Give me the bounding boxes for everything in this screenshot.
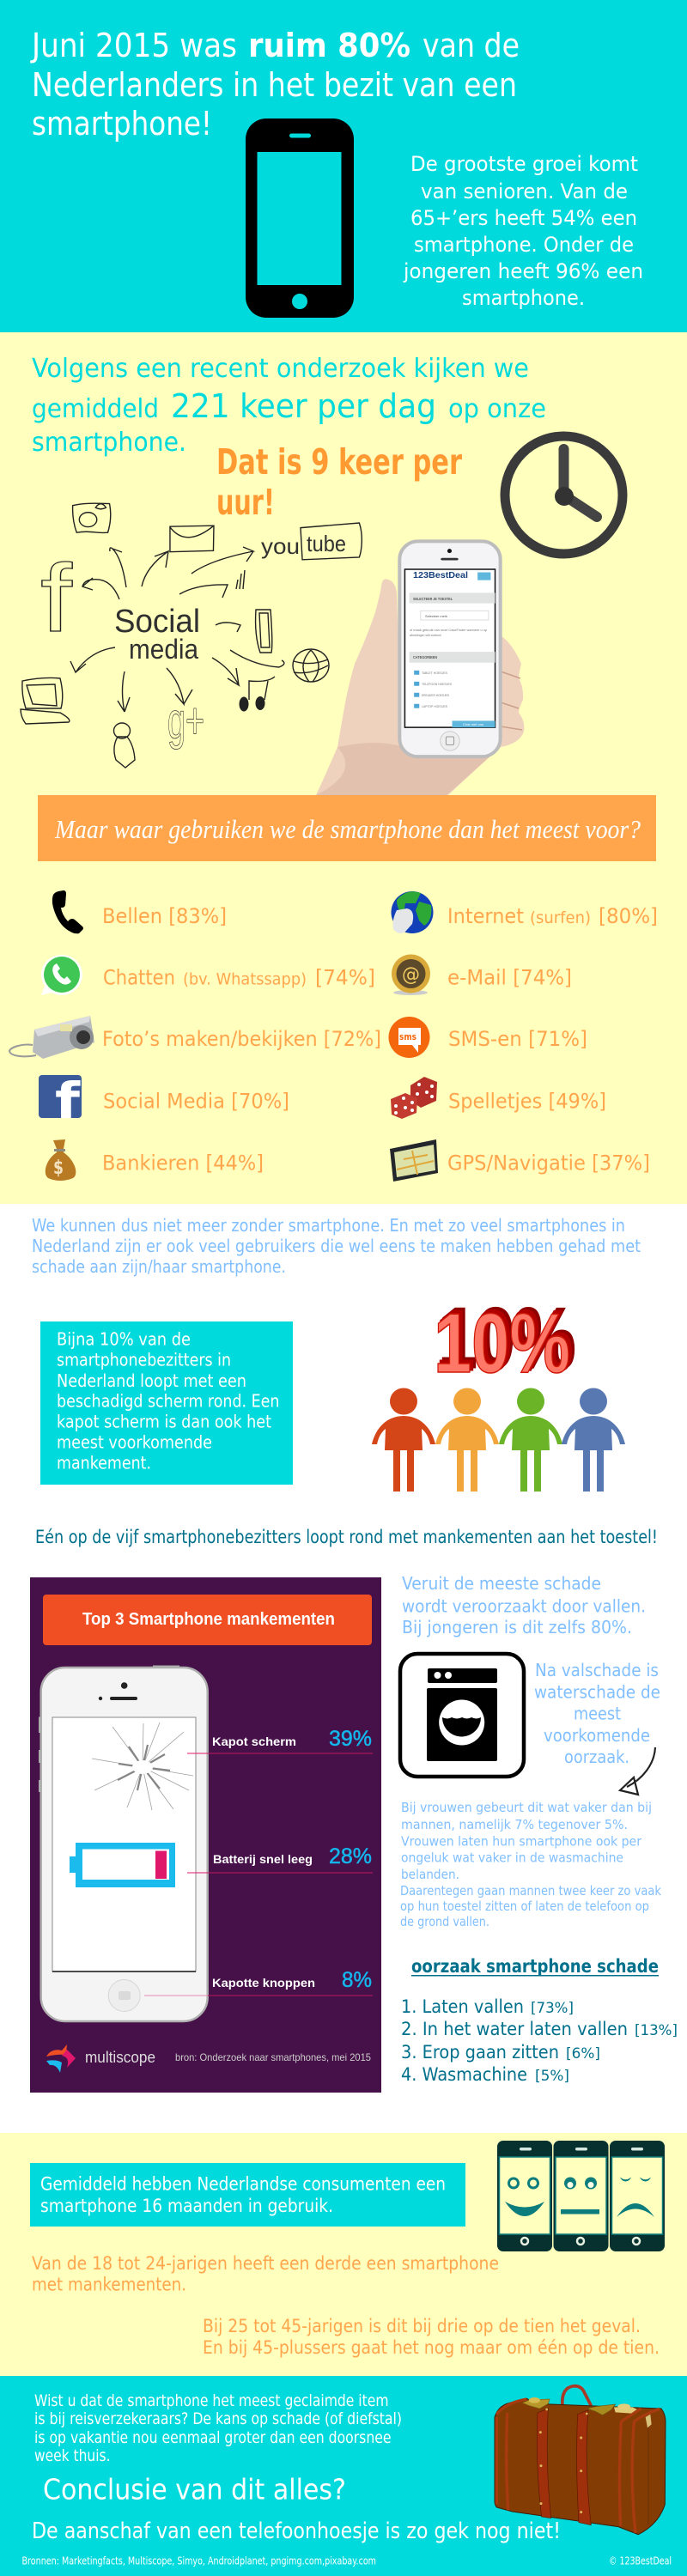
text: intro damage: We kunnen dus niet meer zonder smartphone. En met zo veel smartphones in — [32, 1215, 625, 1236]
chart labels: defects: Kapot scherm — [212, 1735, 296, 1748]
item: Internet: Internet — [447, 904, 524, 928]
item: Spelletjes — [391, 1077, 606, 1119]
illustration: social media sketch: f — [40, 544, 73, 652]
illustration: social media sketch: Social — [114, 604, 200, 640]
illustration: social media sketch: tube — [307, 531, 346, 556]
text: falling causes — [402, 1573, 646, 1637]
text: 9 times per hour — [216, 441, 463, 523]
list: causes: 3. Erop gaan zitten — [401, 2042, 559, 2063]
panel: conclusion — [0, 2376, 687, 2576]
callout: 10 percent: Bijna 10% van de — [57, 1329, 191, 1350]
text: men vs women — [400, 1800, 661, 1929]
illustration: cracked screen — [92, 1722, 193, 1810]
text: 221 times a day: Volgens een recent onderzoek kijken we — [32, 354, 529, 384]
callout: 16 months — [30, 2163, 465, 2227]
illustration: battery — [70, 1843, 175, 1887]
graphic: 10 percent 3D: 10% — [436, 1293, 573, 1388]
item: Social Media: Social Media [70%] — [103, 1090, 289, 1114]
illustration: hand holding phone: of maak gebruik van onze CaseFinder wanneer u op — [410, 629, 487, 632]
text: growth among seniors — [403, 152, 643, 310]
title: van de — [423, 27, 520, 64]
item: e-Mail: @ — [402, 964, 420, 986]
item: SMS-en: SMS-en [71%] — [448, 1027, 587, 1051]
title: Juni 2015 was — [30, 27, 237, 64]
illustration: phone — [39, 1666, 208, 2021]
text: water damage: Na valschade is — [535, 1660, 659, 1680]
header: top 3: Top 3 Smartphone mankementen — [82, 1610, 335, 1629]
item: Foto's: Foto’s maken/bekijken [72%] — [102, 1027, 381, 1051]
list: causes: 1. Laten vallen — [401, 1996, 524, 2017]
item: GPS: GPS/Navigatie [37%] — [447, 1151, 650, 1176]
item: Chatten — [41, 955, 375, 995]
text: intro damage: schade aan zijn/haar smartphone. — [32, 1256, 286, 1277]
list: causes: 2. In het water laten vallen — [401, 2019, 628, 2039]
text: falling causes: Bij jongeren is dit zelfs 80%. — [402, 1617, 632, 1637]
text: water damage: voorkomende — [544, 1725, 650, 1746]
item: Internet: (surfen) — [530, 908, 591, 927]
item: Chatten: [74%] — [315, 966, 375, 990]
text: men vs women: belanden. — [401, 1867, 459, 1882]
illustration: hand holding phone: EREADER HOESJES — [422, 694, 450, 697]
list: causes: [13%] — [635, 2022, 678, 2039]
chart labels: defects: Batterij snel leeg — [213, 1852, 313, 1866]
text: men vs women: mannen, namelijk 7% tegenover 5%. — [401, 1817, 628, 1832]
callout: 10 percent: beschadigd scherm rond. Een — [57, 1391, 280, 1412]
logo: multiscope — [46, 2044, 371, 2073]
text: travel insurance: is op vakantie nou eenmaal groter dan een doorsnee — [34, 2428, 392, 2447]
item: SMS-en — [388, 1017, 587, 1058]
text: travel insurance — [34, 2391, 402, 2465]
callout: 10 percent: meest voorkomende — [57, 1432, 212, 1453]
text: travel insurance: Wist u dat de smartphone het meest geclaimde item — [34, 2391, 388, 2410]
text: 221 times a day: smartphone. — [32, 428, 186, 458]
item: Chatten: (bv. Whatssapp) — [183, 970, 307, 989]
text: men vs women: de grond vallen. — [400, 1914, 489, 1929]
panel: usage — [0, 332, 687, 1204]
text: sources: Bronnen: Marketingfacts, Multiscope, Simyo, Androidplanet, pngimg.com,pixabay.com — [22, 2554, 376, 2567]
illustration: hand holding phone: 123BestDeal — [413, 571, 468, 580]
text: 221 times a day — [32, 354, 546, 458]
text: 9 times per hour: Dat is 9 keer per — [216, 441, 463, 483]
text: travel insurance: is bij reisverzekeraars? De kans op schade (of diefstal) — [34, 2409, 402, 2428]
callout: 16 months: Gemiddeld hebben Nederlandse consumenten een — [40, 2174, 446, 2195]
item: Internet: [80%] — [599, 904, 658, 928]
header: top 3 — [43, 1595, 372, 1645]
text: age groups — [32, 2253, 660, 2358]
title: Nederlanders in het bezit van een — [32, 66, 517, 104]
list: causes: [73%] — [531, 2000, 574, 2017]
text: growth among seniors: 65+’ers heeft 54% een — [410, 206, 637, 230]
text: buy a phone case: De aanschaf van een telefoonhoesje is zo gek nog niet! — [32, 2518, 561, 2544]
text: men vs women: Vrouwen laten hun smartphone ook per — [401, 1834, 642, 1850]
icon: clock — [505, 436, 623, 554]
icon: three phone faces — [497, 2141, 665, 2251]
icon: smartphone — [246, 118, 354, 318]
title: ruim 80% — [248, 27, 410, 64]
text: water damage: meest — [574, 1704, 621, 1724]
logo: multiscope: multiscope — [85, 2049, 155, 2066]
item: Foto's — [9, 1016, 381, 1059]
text: water damage — [534, 1660, 660, 1767]
graphic: four people — [372, 1388, 625, 1492]
arrow: hand-drawn — [620, 1747, 655, 1795]
item: e-Mail — [392, 955, 572, 995]
chart labels: defects: Kapotte knoppen — [212, 1976, 315, 1990]
text: growth among seniors: van senioren. Van de — [421, 179, 628, 204]
icon: suitcase — [495, 2386, 666, 2535]
list: causes: 4. Wasmachine — [401, 2064, 527, 2085]
item: Social Media — [39, 1072, 289, 1130]
list: usage percentages — [9, 890, 658, 1182]
panel: top 3 defects — [30, 1577, 381, 2093]
chart labels: defects: 8% — [342, 1968, 372, 1992]
text: growth among seniors: smartphone. Onder de — [414, 233, 634, 257]
text: age groups: Van de 18 tot 24-jarigen heeft een derde een smartphone — [32, 2253, 499, 2274]
item: Bellen — [52, 890, 227, 933]
callout: 10 percent: Nederland loopt met een — [57, 1370, 246, 1391]
banner: question — [38, 795, 656, 861]
illustration: hand holding phone: SELECTEER JE TOESTEL — [413, 597, 453, 601]
text: falling causes: wordt veroorzaakt door vallen. — [402, 1595, 646, 1616]
text: 221 times a day: 221 keer per dag — [171, 387, 436, 425]
graphic: 10 percent 3D: 10% — [439, 1291, 575, 1385]
chart labels: defects: 39% — [329, 1727, 372, 1751]
illustration: social media sketch: media — [129, 634, 198, 665]
graphic: 10 percent 3D: 10% — [434, 1296, 570, 1390]
text: water damage: oorzaak. — [564, 1747, 629, 1767]
heading: conclusion: Conclusie van dit alles? — [43, 2473, 346, 2506]
illustration: hand holding phone: LAPTOP HOESJES — [422, 705, 448, 708]
illustration: social media sketch: g+ — [167, 692, 204, 750]
illustration: hand holding phone: Selecteer merk — [425, 614, 447, 618]
text: 9 times per hour: uur! — [216, 482, 275, 523]
callout: 10 percent: mankement. — [57, 1453, 151, 1473]
text: men vs women: Bij vrouwen gebeurt dit wat vaker dan bij — [401, 1800, 652, 1815]
chart labels: defects: 28% — [329, 1844, 372, 1868]
item: Spelletjes: Spelletjes [49%] — [448, 1090, 606, 1114]
panel: damage — [30, 1215, 678, 2093]
panel: usage duration — [0, 2133, 687, 2376]
item: GPS — [390, 1139, 650, 1182]
text: growth among seniors: jongeren heeft 96% een — [403, 259, 643, 283]
illustration: hand holding phone: Chat met ons — [463, 722, 483, 726]
item: e-Mail: e-Mail [74%] — [447, 966, 572, 990]
chart labels: defects — [144, 1727, 373, 1996]
list: causes: [6%] — [566, 2045, 600, 2063]
item: Bankieren: Bankieren [44%] — [102, 1151, 264, 1176]
text: men vs women: ongeluk wat vaker in de wasmachine — [401, 1850, 623, 1865]
text: men vs women: op hun toestel zitten of laten de telefoon op — [400, 1899, 649, 1914]
illustration: hand holding phone: TABLET HOESJES — [422, 671, 448, 675]
text: 221 times a day: op onze — [448, 394, 546, 424]
illustration: hand holding phone: CATEGORIEEN — [413, 655, 437, 659]
text: falling causes: Veruit de meeste schade — [402, 1573, 601, 1594]
logo: multiscope: bron: Onderzoek naar smartphones, mei 2015 — [175, 2051, 371, 2063]
icon: washing machine — [400, 1654, 524, 1777]
item: Bankieren — [46, 1139, 264, 1181]
title: smartphone! — [32, 105, 212, 143]
text: growth among seniors: De grootste groei komt — [410, 152, 638, 176]
illustration: hand holding phone: afmetingen wilt zoeken! — [410, 634, 441, 637]
callout: 10 percent — [40, 1321, 293, 1485]
text: age groups: met mankementen. — [32, 2274, 186, 2294]
item: Social Media: f — [55, 1072, 81, 1130]
item: Bankieren: $ — [53, 1157, 64, 1179]
item: Bellen: Bellen [83%] — [102, 904, 227, 928]
title — [30, 27, 520, 143]
illustration: hand holding phone — [316, 541, 524, 795]
callout: 16 months: smartphone 16 maanden in gebruik. — [40, 2196, 333, 2216]
illustration: social media sketch: you — [261, 533, 300, 559]
list: causes: [5%] — [535, 2068, 569, 2085]
panel: smartphone ownership — [0, 0, 687, 332]
text: 221 times a day: gemiddeld — [32, 394, 159, 424]
text: intro damage — [32, 1215, 641, 1277]
text: age groups: Bij 25 tot 45-jarigen is dit bij drie op de tien het geval. — [203, 2316, 641, 2336]
illustration: hand holding phone: TELEFOON HOESJES — [422, 683, 453, 686]
text: travel insurance: week thuis. — [34, 2446, 110, 2465]
list: causes — [401, 1996, 678, 2085]
callout: 10 percent: smartphonebezitters in — [57, 1350, 231, 1370]
text: growth among seniors: smartphone. — [462, 286, 585, 310]
item: Internet — [392, 891, 658, 933]
item: Chatten: Chatten — [103, 966, 175, 990]
item: SMS-en: sms — [399, 1031, 416, 1042]
text: water damage: waterschade de — [534, 1681, 660, 1702]
illustration: social media sketch — [21, 503, 362, 768]
callout: 10 percent: kapot scherm is dan ook het — [57, 1412, 271, 1432]
